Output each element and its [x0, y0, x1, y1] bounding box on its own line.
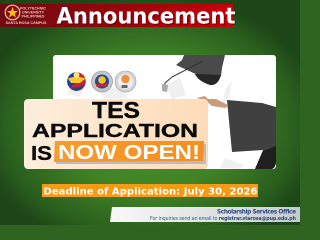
banner: NOW OPEN: NOW OPEN! [58, 142, 200, 164]
university logo: POLYTECHNIC [20, 6, 46, 10]
footer strip [110, 207, 300, 222]
white photo panel [53, 55, 276, 169]
office name: Scholarship Services Office [217, 210, 296, 216]
deadline bar: Deadline of Application: July 30, 2026 [44, 186, 258, 198]
contact line: For inquiries send an email to registrar.starosa@pup.edu.ph [150, 216, 297, 222]
icon: graduation cap [162, 55, 225, 92]
graduate arm [196, 96, 276, 169]
faint thrown paper shapes [68, 78, 244, 169]
logos [67, 71, 136, 92]
heading: IS: IS [31, 143, 52, 165]
university logo: UNIVERSITY [22, 10, 45, 14]
university logo: PHILIPPINES [22, 14, 45, 18]
heading: TES: TES [92, 97, 140, 123]
title: Announcement [58, 4, 237, 30]
title: Announcement [56, 4, 236, 30]
heading: APPLICATION: APPLICATION [32, 121, 198, 141]
university logo: SANTA ROSA CAMPUS [6, 21, 47, 25]
logo: philippine flag seal [67, 72, 86, 91]
headline card [24, 97, 208, 169]
university logo [5, 5, 47, 25]
logo: orange sun seal [115, 71, 136, 92]
header banner [0, 4, 237, 30]
logo: blue sun seal [92, 71, 112, 92]
